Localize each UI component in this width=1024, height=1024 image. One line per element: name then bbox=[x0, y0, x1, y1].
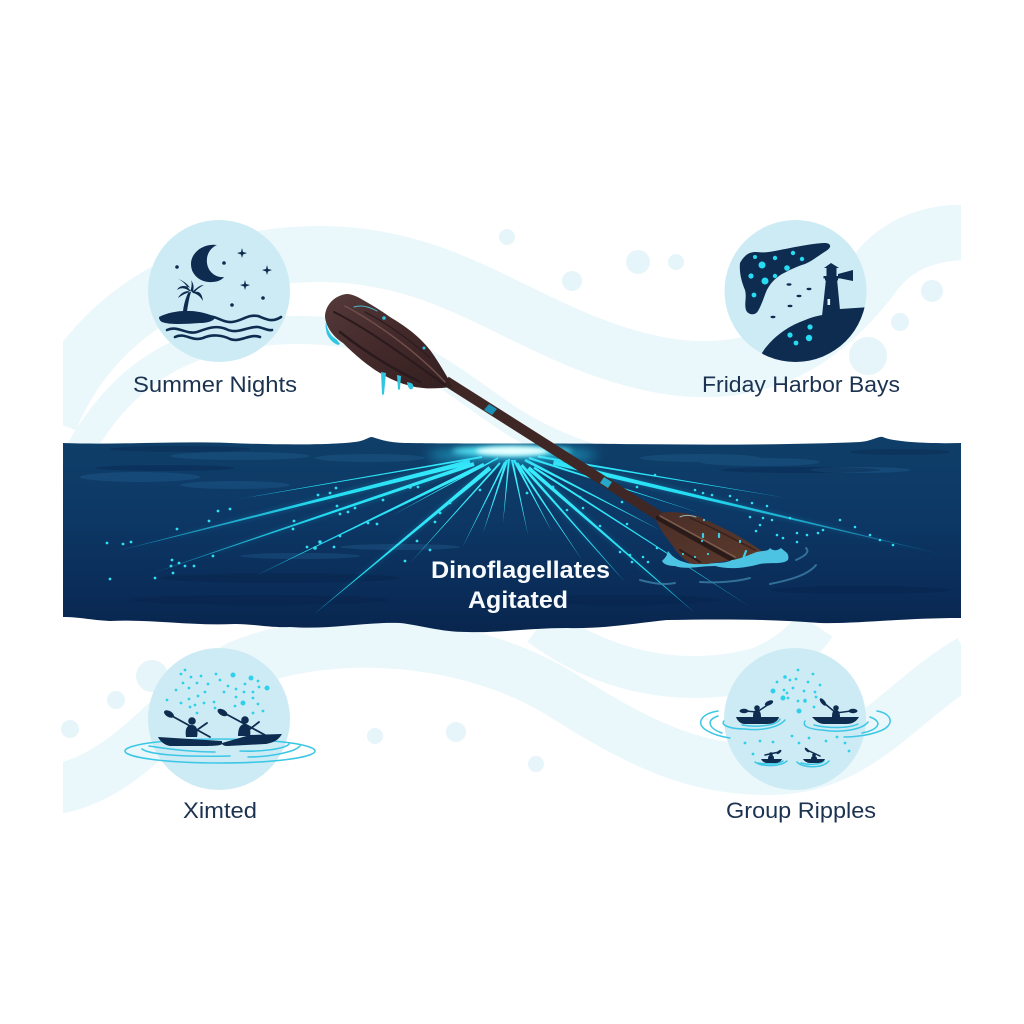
label: friday harbor bays: Friday Harbor Bays bbox=[702, 372, 900, 397]
icon: tandem kayak with plankton bbox=[125, 648, 315, 790]
kayaks bbox=[736, 705, 859, 763]
ripples bbox=[701, 711, 890, 767]
lighthouse bbox=[822, 263, 853, 316]
light rays glow bbox=[216, 460, 838, 570]
paddle shaft bbox=[446, 381, 662, 518]
icon: four kayaks with ripples bbox=[701, 648, 890, 790]
label: group ripples: Group Ripples bbox=[726, 798, 876, 823]
panel: ocean band with bioluminescent rays bbox=[63, 430, 961, 640]
ocean water bbox=[63, 430, 961, 640]
panel: summer nights bbox=[133, 220, 297, 397]
light rays bbox=[113, 455, 945, 615]
icon: bay map with lighthouse bbox=[724, 220, 870, 370]
icon: moon, palm island and waves bbox=[148, 220, 290, 362]
surface glow bbox=[427, 446, 597, 462]
title second line: Agitated bbox=[468, 587, 568, 614]
plankton sparkles bbox=[107, 475, 893, 579]
title: Dinoflagellates Agitated: Dinoflagellates bbox=[431, 557, 610, 584]
ripples bbox=[125, 739, 315, 763]
splash bbox=[662, 548, 788, 568]
lower blade bbox=[655, 512, 763, 566]
blade droplets bbox=[683, 520, 746, 559]
plankton dots bbox=[745, 670, 849, 754]
paddle bbox=[325, 294, 788, 568]
island bbox=[740, 243, 830, 314]
upper blade drips bbox=[326, 316, 426, 395]
label: summer nights: Summer Nights bbox=[133, 372, 297, 397]
palm tree bbox=[177, 279, 204, 311]
plankton dots bbox=[167, 670, 267, 713]
label: ximted: Ximted bbox=[183, 798, 257, 823]
kayaks bbox=[158, 716, 282, 746]
panel: ximted bbox=[125, 648, 315, 823]
shaft wraps bbox=[484, 404, 497, 415]
background swirls bbox=[50, 232, 970, 790]
headland bbox=[762, 307, 864, 362]
background bubbles bbox=[61, 229, 943, 772]
panel: friday harbor bays bbox=[702, 220, 900, 397]
ripples around blade bbox=[640, 548, 816, 584]
panel: group ripples bbox=[701, 648, 890, 823]
upper blade bbox=[325, 294, 452, 388]
